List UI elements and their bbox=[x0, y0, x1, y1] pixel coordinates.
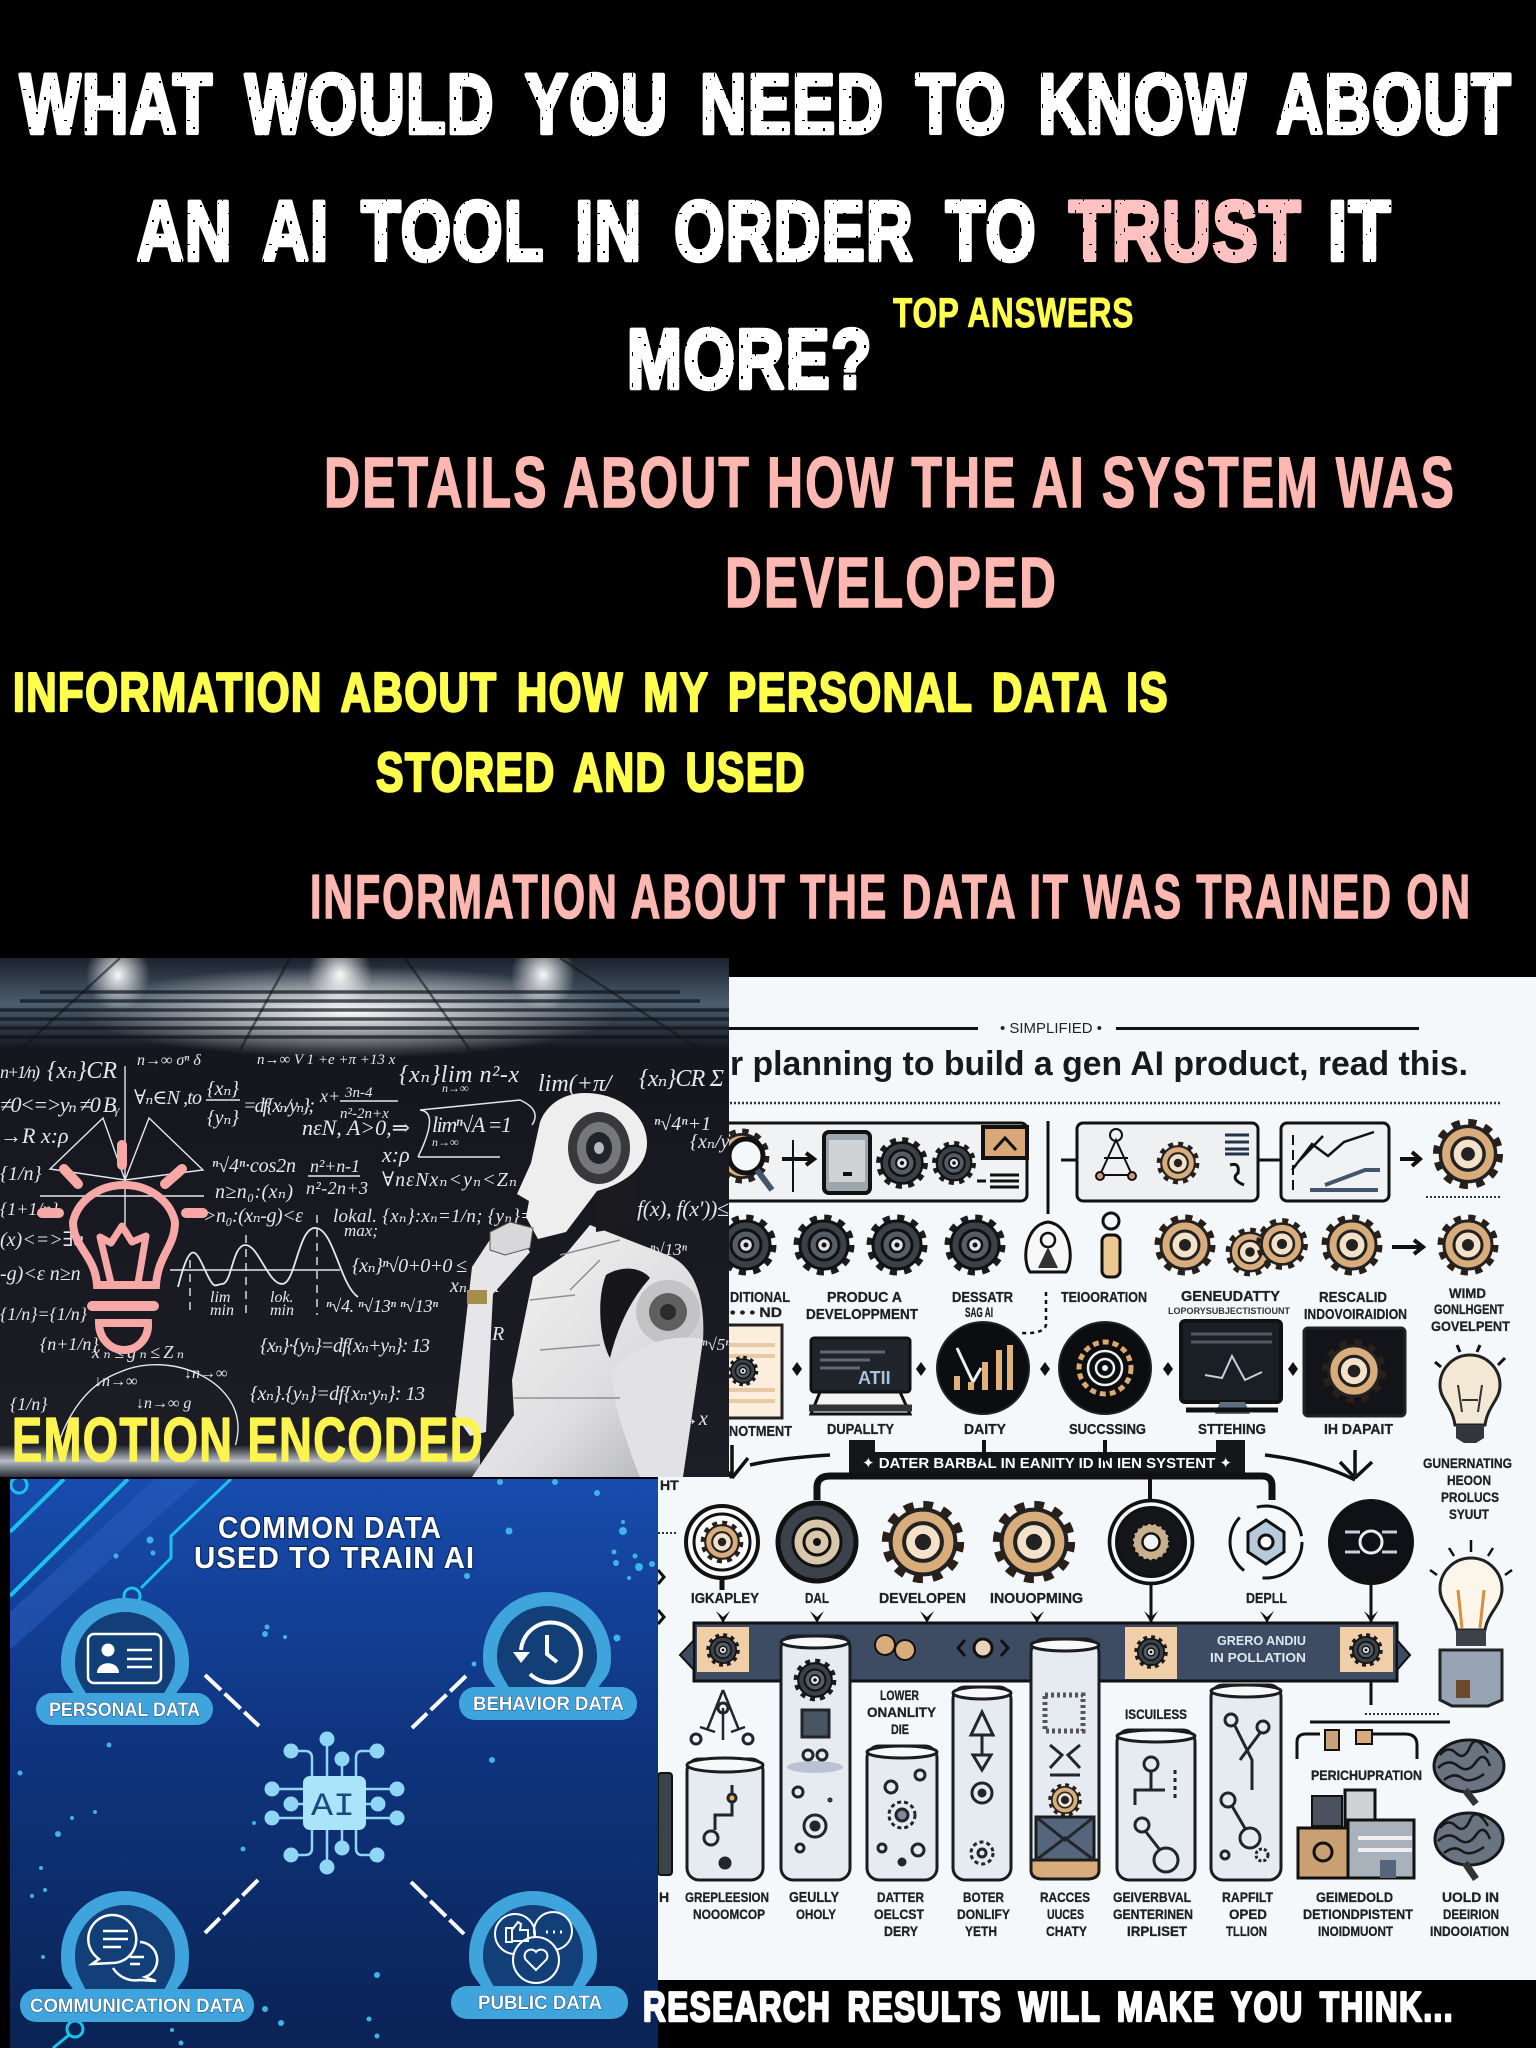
row 2 labels: GOVELPENT bbox=[1431, 1318, 1510, 1334]
blackboard equations: {yₙ} bbox=[207, 1107, 239, 1129]
row 3 labels: IH DAPAIT bbox=[1324, 1421, 1393, 1438]
blackboard equations: {xₙ}ⁿ√0+0+0 ≤ bbox=[352, 1255, 467, 1277]
right label block: PROLUCS bbox=[1441, 1489, 1499, 1505]
row 2 labels: RESCALID bbox=[1319, 1289, 1387, 1306]
small cylinder captions: LOWER bbox=[880, 1687, 919, 1703]
blackboard equations: n²-2n+3 bbox=[306, 1178, 368, 1198]
bottom caption grid: GREPLEESION bbox=[685, 1889, 769, 1905]
dashed connectors bbox=[205, 1675, 466, 1934]
row 4 labels: DEVELOPEN bbox=[879, 1590, 966, 1607]
blackboard equations: xₙ→R bbox=[449, 1275, 499, 1297]
answer: personal data bbox=[13, 661, 1169, 803]
blackboard equations: {xₙ}·{yₙ}=df{xₙ+yₙ}: 13 bbox=[260, 1335, 430, 1357]
blackboard equations: x+ bbox=[319, 1086, 340, 1106]
row 2 labels: TEIOORATION bbox=[1061, 1289, 1147, 1306]
blackboard equations: →R x:ρ bbox=[0, 1123, 69, 1148]
panel heading: COMMON DATA bbox=[218, 1510, 442, 1545]
row 2 labels: PRODUC A bbox=[827, 1289, 902, 1306]
blackboard equations: ⁿ√4. ⁿ√13ⁿ ⁿ√13ⁿ bbox=[326, 1296, 438, 1316]
blackboard equations: (x)<=>∃q bbox=[0, 1229, 84, 1251]
top answers label: TOP ANSWERS bbox=[893, 289, 1134, 336]
blackboard equations: min bbox=[270, 1302, 294, 1319]
bottom caption grid: DEEIRION bbox=[1443, 1906, 1499, 1922]
panel: gen AI product diagram bbox=[658, 977, 1536, 1980]
bottom caption grid: OELCST bbox=[874, 1906, 924, 1922]
blackboard equations: {xₙ}CR bbox=[47, 1058, 117, 1084]
blackboard equations: {n+1/n} bbox=[40, 1334, 99, 1354]
blackboard equations: :X→x bbox=[660, 1408, 708, 1430]
bottom caption grid: TLLION bbox=[1226, 1923, 1267, 1939]
bottom caption grid: NOOOMCOP bbox=[693, 1906, 765, 1922]
upper arm bbox=[612, 1338, 703, 1477]
panel: AI robot at blackboard bbox=[0, 939, 746, 1477]
icon: id card bbox=[88, 1634, 161, 1683]
blackboard equations: max; bbox=[344, 1221, 378, 1240]
cylinder contents bbox=[691, 1661, 1269, 1872]
bottom caption grid: OHOLY bbox=[796, 1906, 837, 1922]
blackboard equations: n≥n₀:(xₙ) bbox=[215, 1181, 293, 1203]
left edge remnants: HT bbox=[660, 1477, 679, 1493]
caption: emotion encoded: EMOTION ENCODED bbox=[12, 1406, 484, 1475]
blackboard equations: x:ρ bbox=[381, 1142, 410, 1167]
bottom caption grid: IRPLISET bbox=[1127, 1923, 1187, 1939]
row 2 labels: DESSATR bbox=[952, 1289, 1013, 1306]
blackboard equations: {xₙ} bbox=[207, 1078, 239, 1100]
row 3 labels: SUCCSSING bbox=[1069, 1421, 1146, 1438]
blackboard equations: ↓n→∞ bbox=[94, 1373, 137, 1390]
bottom caption grid: OPED bbox=[1229, 1906, 1267, 1922]
badge: communication data: COMMUNICATION DATA bbox=[30, 1996, 245, 2017]
blackboard equations: n+1/n) bbox=[0, 1062, 40, 1083]
bottom caption grid: DATTER bbox=[877, 1889, 924, 1905]
blackboard equations: ↓n→∞ g bbox=[136, 1395, 191, 1412]
row 2 labels: GENEUDATTY bbox=[1181, 1288, 1280, 1305]
circuit traces bbox=[10, 1477, 231, 2048]
blackboard equations: R bbox=[491, 1323, 504, 1345]
row 3 labels: STTEHING bbox=[1198, 1421, 1266, 1438]
shoulder joint bbox=[636, 1280, 700, 1344]
blackboard equations: ⁿ√13ⁿ bbox=[650, 1240, 688, 1259]
head bbox=[517, 1093, 647, 1239]
badge: public data bbox=[451, 1891, 628, 2019]
row 3: screens and dials bbox=[722, 1321, 1405, 1418]
title: MORE? bbox=[627, 312, 873, 406]
blackboard equations: lok. bbox=[270, 1289, 294, 1306]
row 4 labels: INOUOPMING bbox=[990, 1590, 1083, 1607]
blackboard equations: {1+1/n} bbox=[0, 1199, 59, 1219]
row 2 labels: DITIONAL bbox=[730, 1289, 790, 1306]
row 2 labels: GONLHGENT bbox=[1434, 1301, 1504, 1317]
blackboard equations: -g)<ε n≥n bbox=[0, 1263, 81, 1285]
row 2 labels bbox=[730, 1285, 1510, 1334]
forearm and hand bbox=[455, 1235, 530, 1436]
scattered dots bbox=[18, 1479, 655, 2046]
blackboard equations: ∞ⁿ√5ⁿ bbox=[690, 1335, 731, 1354]
badge: behavior data bbox=[459, 1592, 637, 1720]
small cylinder captions: DIE bbox=[891, 1721, 909, 1737]
diagram header: • SIMPLIFIED • bbox=[1000, 1020, 1102, 1037]
icon: chat bubbles bbox=[88, 1915, 157, 1981]
blackboard equations: min bbox=[210, 1302, 234, 1319]
bottom caption grid: RACCES bbox=[1040, 1889, 1090, 1905]
row 2 labels: DEVELOPPMENT bbox=[806, 1306, 918, 1323]
blackboard equations: n²+n-1 bbox=[310, 1156, 360, 1176]
row 4 labels bbox=[691, 1590, 1287, 1607]
row 1 gears bbox=[879, 1123, 1501, 1197]
blackboard equations: limⁿ√A =1 bbox=[432, 1112, 512, 1137]
blackboard equations: ⁿ√4ⁿ bbox=[660, 1330, 689, 1349]
blackboard equations: 3n-4 bbox=[344, 1085, 373, 1101]
panel: common data used to train AI bbox=[10, 1477, 658, 2048]
row 3 labels: NOTMENT bbox=[729, 1423, 792, 1440]
title bbox=[20, 57, 1512, 406]
badge: communication data bbox=[20, 1891, 254, 2022]
icon: social bubbles bbox=[495, 1912, 572, 1983]
row 3 labels bbox=[729, 1421, 1393, 1440]
panel heading: USED TO TRAIN AI bbox=[194, 1540, 475, 1575]
diagram header: r planning to build a gen AI product, read this. bbox=[730, 1045, 1468, 1083]
right label block: GUNERNATING bbox=[1423, 1455, 1512, 1471]
blackboard equations: n→∞ bbox=[442, 1081, 469, 1095]
row 4 labels: IGKAPLEY bbox=[691, 1590, 759, 1607]
ceiling lights bbox=[0, 958, 729, 1056]
row 3 labels: DUPALLTY bbox=[827, 1421, 894, 1438]
icon: AI chip bbox=[264, 1732, 404, 1874]
blackboard equations: ≠0<=>yₙ ≠0 Bᵧ bbox=[0, 1092, 120, 1117]
blackboard equations: >n₀:(xₙ-g)<ε bbox=[203, 1205, 303, 1227]
neck bbox=[596, 1227, 604, 1232]
floor reflection bbox=[0, 1445, 480, 1477]
blackboard equations: ∀ₙ∈N ,to bbox=[134, 1087, 202, 1109]
bottom caption grid: UOLD IN bbox=[1442, 1889, 1499, 1905]
blackboard equations: n→∞ bbox=[432, 1135, 459, 1149]
row 2 labels: WIMD bbox=[1449, 1285, 1486, 1301]
icon: light bulb bbox=[1435, 1345, 1505, 1443]
robot figure bbox=[455, 1093, 703, 1477]
bottom caption grid: RAPFILT bbox=[1222, 1889, 1273, 1905]
answer: personal data: STORED AND USED bbox=[376, 741, 806, 803]
building block bbox=[1297, 1722, 1450, 1878]
blackboard equations: lokal. {xₙ}:xₙ=1/n; {yₙ}= bbox=[333, 1206, 533, 1227]
row 2: gears and icons bbox=[719, 1213, 1495, 1277]
blackboard equations: {xₙ}CR Σ bbox=[639, 1066, 724, 1092]
board diagrams bbox=[40, 1066, 358, 1477]
building block: PERICHUPRATION bbox=[1311, 1767, 1422, 1783]
blackboard equations: {xₙ}.{yₙ}=df{xₙ·yₙ}: 13 bbox=[250, 1383, 425, 1405]
icon: pink light bulb bbox=[42, 1145, 203, 1350]
blackboard equations: nεN, A>0,⇒ bbox=[302, 1115, 410, 1140]
row 3: screens and dials: ATII bbox=[858, 1368, 891, 1388]
row 4 labels: DEPLL bbox=[1246, 1590, 1287, 1607]
diagram header bbox=[729, 1020, 1501, 1103]
blackboard equations: {1/n} bbox=[0, 1163, 42, 1185]
bottom caption grid: DERY bbox=[884, 1923, 919, 1939]
bottom caption grid: BOTER bbox=[963, 1889, 1004, 1905]
bottom caption grid: UUCES bbox=[1047, 1906, 1084, 1922]
badge: personal data bbox=[36, 1598, 213, 1725]
badge: personal data: PERSONAL DATA bbox=[49, 1700, 200, 1721]
blackboard equations: xₙ≤gₙ≤Zₙ bbox=[91, 1342, 184, 1362]
bottom caption grid: GENTERINEN bbox=[1113, 1906, 1193, 1922]
row 4: gears bbox=[686, 1501, 1412, 1590]
row 2 labels: • • • ND bbox=[730, 1304, 782, 1320]
ear disc bbox=[568, 1112, 630, 1184]
bottom caption grid bbox=[685, 1889, 1509, 1939]
icon: history clock bbox=[513, 1622, 581, 1682]
small cylinder captions: ONANLITY bbox=[867, 1704, 937, 1720]
title: IT bbox=[1328, 184, 1392, 278]
blackboard equations: {1/n} bbox=[10, 1394, 48, 1414]
bottom caption grid: DETIONDPISTENT bbox=[1303, 1906, 1413, 1922]
bottom caption grid: YETH bbox=[965, 1923, 997, 1939]
answer: development details bbox=[324, 444, 1456, 623]
system banner with connectors: ✦ DATER BARBAL IN EANITY ID IN IEN SYSTENT ✦ bbox=[862, 1455, 1232, 1472]
shoulder gap bbox=[600, 1269, 650, 1358]
horizontal pipeline band: GRERO ANDIU bbox=[1217, 1633, 1306, 1648]
small cylinder captions: ISCUILESS bbox=[1125, 1706, 1187, 1722]
blackboard equations: ∀nεNxₙ<yₙ<Zₙ bbox=[382, 1169, 517, 1191]
torso bbox=[472, 1225, 703, 1477]
blackboard equations: {1/n}={1/n} bbox=[0, 1304, 88, 1324]
blackboard equations: ↓n→∞ bbox=[184, 1365, 227, 1382]
answer: personal data: INFORMATION ABOUT HOW MY PERSONAL DATA IS bbox=[13, 661, 1169, 723]
bottom caption grid: GEULLY bbox=[789, 1889, 839, 1906]
row 1: process boxes bbox=[718, 1121, 1420, 1214]
blackboard equations bbox=[0, 1052, 746, 1430]
blackboard equations: n²-2n+x bbox=[340, 1106, 389, 1122]
icon: AI chip: AI bbox=[311, 1788, 355, 1825]
right label block bbox=[1423, 1455, 1512, 1522]
title: TRUST bbox=[1069, 184, 1302, 278]
panel heading bbox=[194, 1516, 474, 1570]
row 2 labels: SAG AI bbox=[965, 1304, 993, 1320]
blackboard equations: lim(+π/ bbox=[538, 1071, 614, 1097]
bottom caption grid: INOIDMUONT bbox=[1318, 1923, 1393, 1939]
horizontal pipeline band bbox=[680, 1584, 1410, 1705]
row 4 labels: DAL bbox=[805, 1590, 829, 1607]
row 3 labels: DAITY bbox=[964, 1421, 1006, 1438]
bottom caption grid: GEIMEDOLD bbox=[1316, 1889, 1393, 1905]
blackboard equations: =df{xₙ/yₙ}; bbox=[243, 1095, 315, 1117]
bottom caption grid: INDOOIATION bbox=[1430, 1923, 1509, 1939]
badge: public data: PUBLIC DATA bbox=[478, 1993, 602, 2014]
left edge remnants bbox=[658, 1477, 679, 1905]
right label block: SYUUT bbox=[1449, 1506, 1489, 1522]
glass cylinders bbox=[687, 1636, 1281, 1880]
bottom caption grid: DONLIFY bbox=[957, 1906, 1011, 1922]
small cylinder captions bbox=[867, 1687, 1187, 1737]
icon: brains and bulb bbox=[1365, 1540, 1512, 1879]
bottom caption grid: GEIVERBVAL bbox=[1113, 1889, 1191, 1905]
left edge remnants: H bbox=[659, 1889, 669, 1905]
title: AN AI TOOL IN ORDER TO bbox=[137, 184, 1037, 278]
blackboard equations: ⁿ√4ⁿ+1 bbox=[654, 1113, 711, 1135]
blackboard equations: f(x), f(x'))≤ bbox=[637, 1196, 729, 1221]
badge: behavior data: BEHAVIOR DATA bbox=[473, 1694, 624, 1715]
right label block: HEOON bbox=[1447, 1472, 1491, 1488]
answer: development details: DEVELOPED bbox=[725, 544, 1058, 623]
blackboard equations: n→∞ σⁿ δ bbox=[137, 1052, 201, 1069]
row 2 labels: LOPORYSUBJECTISTIOUNT bbox=[1168, 1306, 1290, 1316]
blackboard equations: n→∞ V 1 +e +π +13 x bbox=[257, 1052, 396, 1068]
bottom caption grid: CHATY bbox=[1046, 1923, 1088, 1939]
blackboard equations: {xₙ}lim n²-x bbox=[399, 1062, 519, 1088]
blackboard equations: {xₙ/yₙ} bbox=[690, 1131, 746, 1153]
blackboard equations: lim bbox=[210, 1289, 230, 1306]
horizontal pipeline band: IN POLLATION bbox=[1210, 1650, 1306, 1665]
row 2 labels: INDOVOIRAIDION bbox=[1304, 1306, 1407, 1323]
system banner with connectors bbox=[718, 1440, 1372, 1500]
blackboard equations: ⁿ√4ⁿ·cos2n bbox=[212, 1155, 296, 1177]
